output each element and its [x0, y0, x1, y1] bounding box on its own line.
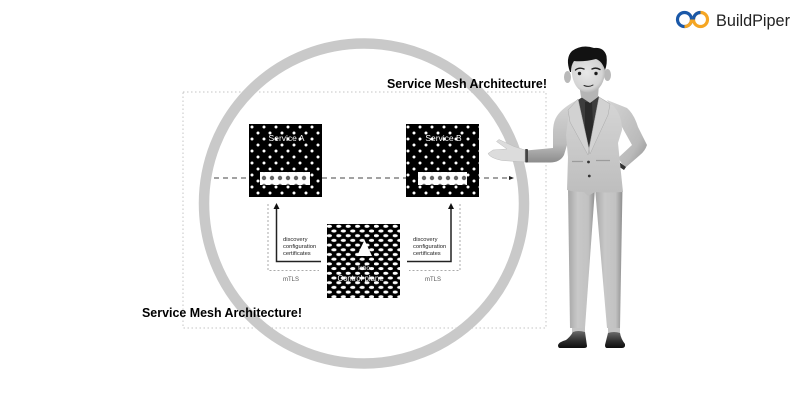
service B proxy — [418, 172, 467, 185]
left link text: certificates — [283, 251, 311, 257]
cuff — [525, 149, 528, 162]
hand — [488, 140, 525, 162]
jacket — [566, 97, 623, 196]
right link text: configuration — [413, 244, 446, 250]
left trouser leg — [568, 188, 595, 328]
left link text: discovery — [283, 237, 308, 243]
extended arm — [526, 100, 577, 162]
mesh label: Istio — [358, 265, 370, 272]
large grey circle — [204, 44, 524, 364]
tie — [585, 102, 593, 147]
heading bottom left: Service Mesh Architecture! — [142, 306, 302, 320]
icon: infinity rings — [678, 12, 708, 26]
head — [571, 56, 605, 92]
control plane label: Control plane — [338, 273, 384, 283]
shirt — [578, 95, 600, 150]
left shoe — [558, 331, 587, 348]
hip cuff — [618, 162, 626, 170]
service A label: Service A — [269, 133, 305, 143]
right shoe — [605, 332, 625, 348]
hair — [568, 47, 607, 72]
service A proxy — [260, 172, 310, 185]
right mTLS label: mTLS — [425, 277, 441, 283]
left mTLS label: mTLS — [283, 277, 299, 283]
pockets — [572, 160, 610, 162]
heading top right: Service Mesh Architecture! — [387, 77, 547, 91]
panel: control plane — [327, 224, 400, 298]
right link text: certificates — [413, 251, 441, 257]
right trouser leg — [595, 188, 622, 328]
face features — [576, 68, 600, 86]
arrow: right mTLS link — [409, 204, 460, 270]
icon: control plane sail — [357, 240, 372, 256]
left sock — [572, 326, 585, 334]
arrow: left mTLS link — [268, 204, 319, 270]
left lapel — [568, 99, 589, 155]
right sock — [608, 326, 620, 334]
dashed connection arrow between services — [214, 176, 514, 180]
service B label: Service B — [425, 133, 462, 143]
neck — [579, 84, 599, 103]
panel: service B — [406, 124, 479, 197]
logo: BuildPiper — [678, 11, 790, 30]
character: presenter in grey suit — [488, 47, 647, 348]
dotted outer frame — [183, 92, 546, 328]
buttons — [587, 161, 591, 177]
right lapel — [589, 97, 610, 154]
right link text: discovery — [413, 237, 438, 243]
arrow: right control link — [407, 203, 454, 262]
panel: service A — [249, 124, 322, 197]
arrow: left control link — [274, 203, 321, 262]
ears — [564, 69, 611, 83]
logo wordmark: BuildPiper — [716, 11, 790, 30]
left link text: configuration — [283, 244, 316, 250]
right arm on hip — [607, 100, 647, 168]
